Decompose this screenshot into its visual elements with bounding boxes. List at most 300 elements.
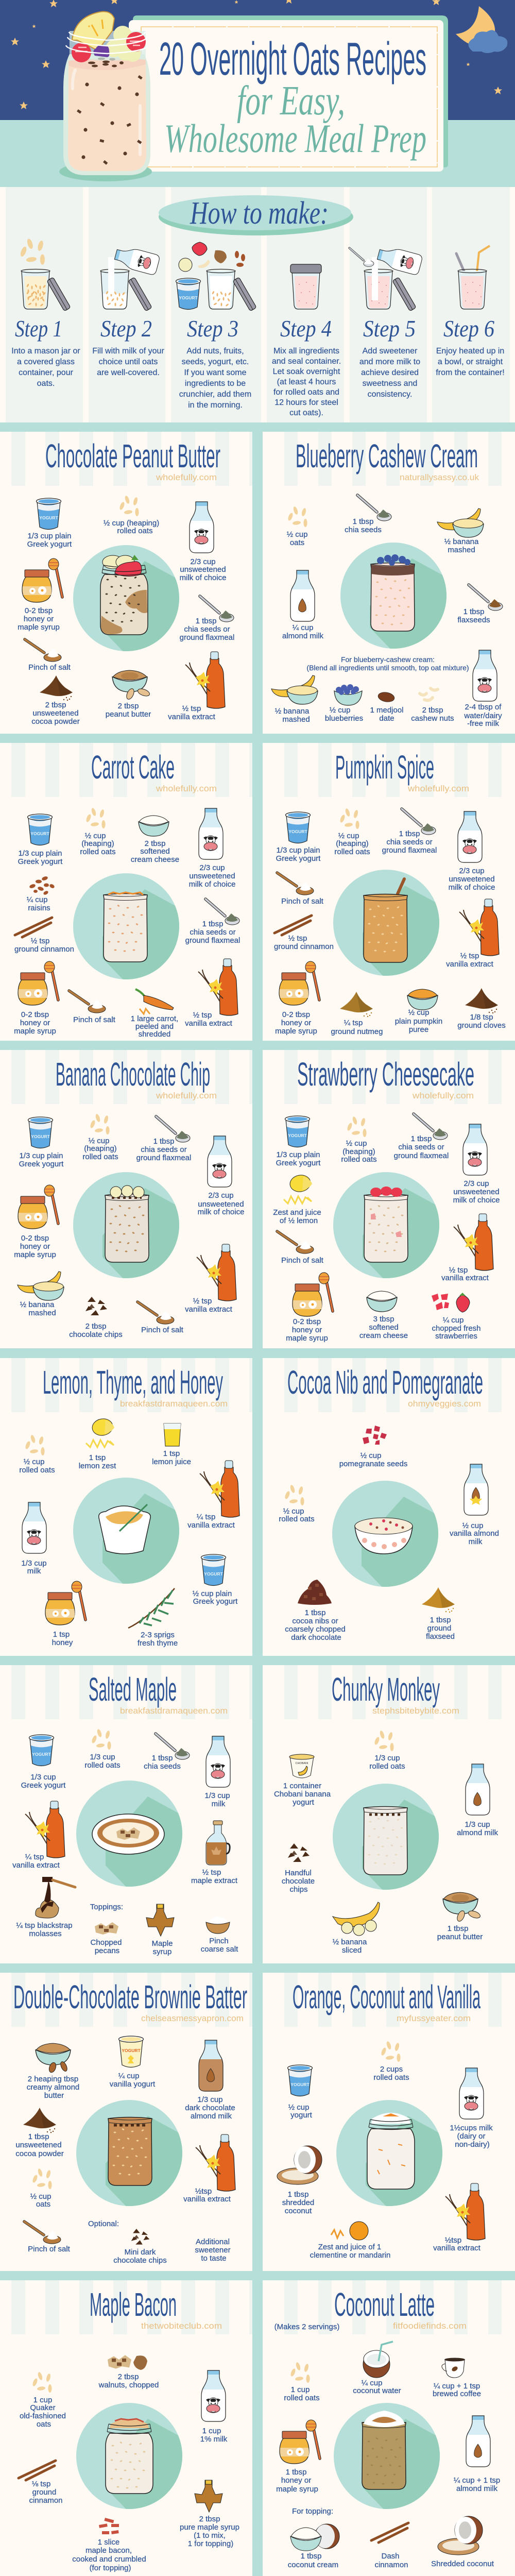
ingredient: strawberries: [432, 1293, 481, 1341]
ingredient: banana: ½ banana: [444, 537, 479, 546]
text: step 4: cut oats).: [289, 409, 323, 417]
ingredient: cocoa powder: 2 tbsp: [45, 701, 66, 709]
label: step 2: Step 2: [100, 315, 152, 342]
ingredient: chia: chia seeds or: [190, 928, 236, 937]
ingredient: chocolate almond milk: 1/3 cup: [197, 2095, 223, 2104]
ingredient: strawberries: ¼ cup: [443, 1316, 464, 1325]
ingredient: vanilla: ½ tsp: [460, 952, 479, 960]
ingredient: oats: [82, 1113, 118, 1161]
ingredient: vanilla: ½ tsp: [193, 1011, 212, 1020]
ingredient: bacon: [72, 2518, 146, 2572]
ingredient: water or milk: -free milk: [467, 719, 499, 728]
text: step 4: Mix all ingredients: [273, 347, 339, 355]
panel: Strawberry Cheesecake: [273, 1056, 500, 1343]
ingredient: lemon juice: lemon juice: [152, 1458, 191, 1466]
ingredient: milk: milk: [27, 1567, 41, 1575]
note: cream directions: (Blend all ingredients until smooth, top oat mixture): [306, 664, 469, 672]
ingredient: maple syrup: [146, 1904, 174, 1956]
ingredient: almond milk: 1/3 cup: [465, 1820, 490, 1829]
label: step 5: Step 5: [363, 315, 416, 342]
ingredient: chia: ground flaxmeal: [394, 1151, 449, 1160]
step 6: [436, 246, 505, 377]
ingredient: bacon: cooked and crumbled: [72, 2555, 146, 2564]
ingredient: yogurt: Greek yogurt: [27, 540, 72, 549]
ingredient: water or milk: water/dairy: [464, 711, 502, 720]
ingredient: honey: honey or: [24, 615, 54, 623]
icon: add nuts, fruits and yogurt: [176, 242, 256, 311]
ingredient: almond milk: almond milk: [457, 1828, 499, 1837]
text: step 3: Add nuts, fruits,: [186, 347, 244, 355]
ingredient: oats: rolled oats: [80, 848, 116, 856]
ingredient: banana: [18, 1272, 64, 1317]
ingredient: oats: [369, 1730, 405, 1771]
ingredient: cream cheese: softened: [369, 1323, 399, 1332]
ingredient: milk: 2/3 cup: [464, 1179, 489, 1188]
ingredient: oats: oats: [290, 538, 304, 547]
ingredient: cloves: ground cloves: [457, 1021, 506, 1030]
ingredient: oats: [341, 1116, 377, 1164]
ingredient: salt: Pinch of salt: [281, 897, 324, 906]
ingredient: cloves: [457, 988, 506, 1030]
ingredient: yogurt: Greek yogurt: [276, 854, 321, 863]
ingredient: salt: Pinch of salt: [281, 1256, 324, 1265]
panel: Carrot Cake: Carrot Cake: [91, 749, 175, 786]
ingredient: honey: 0-2 tbsp: [25, 606, 53, 615]
ingredient: chocolate chips: [282, 1843, 315, 1894]
ingredient: yogurt: 1/3 cup: [30, 1773, 56, 1782]
ingredient: vanilla: vanilla extract: [168, 713, 216, 721]
ingredient: oats: Quaker: [30, 2403, 56, 2412]
ingredient: cinnamon: [371, 2523, 408, 2569]
ingredient: thyme: [128, 1588, 178, 1648]
ingredient: coarse salt: Pinch: [209, 1937, 229, 1945]
ingredient: honey: 0-2 tbsp: [21, 1010, 49, 1019]
source: wholefully.com: [156, 1091, 217, 1100]
ingredient: milk: 2/3 cup: [190, 557, 216, 566]
ingredient: milk: 1 cup: [202, 2427, 221, 2435]
ingredient: oats: ½ cup: [287, 530, 307, 539]
illustration: jar on disc: [73, 545, 183, 660]
ingredient: chia: [136, 1116, 191, 1162]
ingredient: chia: 1 tbsp: [399, 829, 420, 838]
ingredient: yogurt: ½ cup: [288, 2103, 309, 2112]
ingredient: carrot: 1 large carrot,: [131, 1014, 178, 1023]
ingredient: honey: honey or: [20, 1242, 50, 1251]
ingredient: cocoa powder: 1 tbsp: [28, 2132, 49, 2141]
ingredient: chocolate chips: 2 tbsp: [85, 1322, 106, 1331]
panel: Carrot Cake: [14, 749, 240, 1039]
ingredient: milk: [453, 1124, 500, 1205]
ingredient: cocoa nibs: cocoa nibs or: [292, 1617, 338, 1625]
icon: sealed jar: [290, 264, 321, 309]
ingredient: banana mashed: ½ banana: [275, 707, 310, 716]
ingredient: chia: chia seeds or: [386, 838, 433, 846]
ingredient: yogurt: 1/3 cup plain: [27, 532, 72, 540]
text: Lemon, Thyme, and Honey: [43, 1364, 223, 1401]
ingredient: chia: 1 tbsp: [153, 1137, 174, 1146]
ingredient: milk: 1½cups milk: [450, 2124, 493, 2132]
ingredient: chia: [345, 495, 391, 534]
panel: Chocolate Peanut Butter: Chocolate Peanut Butter: [45, 437, 220, 474]
label: optional: Optional:: [88, 2219, 119, 2228]
text: step 3: seeds, yogurt, etc.: [182, 358, 249, 366]
ingredient: vanilla yogurt: [110, 2036, 156, 2089]
ingredient: cocoa powder: [31, 675, 80, 726]
ingredient: date: [370, 691, 404, 723]
illustration: jar on disc: [336, 2100, 446, 2215]
ingredient: honey: [286, 1273, 333, 1343]
ingredient: milk: [21, 1502, 47, 1575]
ingredient: yogurt: yogurt: [290, 2111, 313, 2120]
ingredient: milk: [200, 2370, 228, 2444]
ingredient: oats: rolled oats: [117, 527, 153, 535]
ingredient: almond milk: almond milk: [456, 2484, 498, 2493]
ingredient: peanut butter: [437, 1892, 483, 1941]
ingredient: almond milk: [454, 2416, 500, 2493]
hero mason jar: [59, 11, 152, 181]
illustration: jar on disc: [333, 1172, 443, 1287]
text: step 1: container, pour: [19, 368, 74, 377]
ingredient: cinnamon: ground cinnamon: [274, 942, 334, 951]
ingredient: bacon: 1 slice: [98, 2538, 119, 2547]
source: naturallysassy.co.uk: [400, 472, 479, 482]
ingredient: carrot: [131, 989, 178, 1039]
ingredient: banana: [437, 509, 484, 554]
ingredient: lemon: [273, 1174, 321, 1225]
ingredient: vanilla: vanilla extract: [183, 2195, 231, 2204]
ingredient: chocolate chips: chocolate chips: [69, 1330, 123, 1339]
ingredient: honey: [275, 961, 319, 1036]
ingredient: milk: milk of choice: [198, 1208, 244, 1216]
ingredient: lemon zest: 1 tsp: [89, 1453, 106, 1462]
source: wholefully.com: [412, 1091, 474, 1100]
ingredient: molasses: ¼ tsp blackstrap: [16, 1921, 73, 1930]
source: thetwobiteclub.com: [141, 2321, 222, 2331]
ingredient: cinnamon: [14, 918, 74, 954]
ingredient: banana: [333, 1902, 380, 1955]
ingredient: cinnamon: ground cinnamon: [14, 945, 74, 954]
ingredient: molasses: [16, 1877, 75, 1938]
ingredient: maple extract: ½ tsp: [202, 1868, 221, 1877]
ingredient: flaxseeds: flaxseeds: [457, 616, 490, 624]
ingredient: milk: [198, 1136, 244, 1216]
ingredient: vanilla: vanilla extract: [433, 2244, 481, 2252]
ingredient: oats: rolled oats: [82, 1153, 118, 1161]
ingredient: pumpkin: plain pumpkin: [395, 1017, 442, 1026]
ingredient: oats: 1/3 cup: [374, 1754, 400, 1762]
ingredient: honey: honey: [52, 1638, 73, 1647]
ingredient: vanilla: ¼ tsp: [197, 1513, 215, 1521]
ingredient: carrot: peeled and: [135, 1022, 174, 1031]
ingredient: cinnamon: ground: [32, 2488, 56, 2497]
ingredient: chocolate almond milk: almond milk: [191, 2112, 232, 2121]
ingredient: milk: milk of choice: [449, 883, 495, 892]
ingredient: honey: maple syrup: [18, 623, 60, 632]
ingredient: bacon: maple bacon,: [85, 2546, 132, 2555]
ingredient: flaxseed: 1 tbsp: [430, 1616, 451, 1624]
ingredient: chobani yogurt: 1 container: [283, 1782, 321, 1790]
ingredient: cinnamon: Dash: [381, 2552, 400, 2561]
ingredient: vanilla: ½tsp: [445, 2236, 461, 2245]
ingredient: strawberries: strawberries: [435, 1332, 477, 1341]
ingredient: mini chips: Mini dark: [125, 2248, 156, 2257]
panel: Salted Maple: Salted Maple: [89, 1671, 177, 1708]
ingredient: coffee: brewed coffee: [433, 2389, 481, 2398]
source: wholefully.com: [156, 472, 217, 482]
ingredient: lemon zest: lemon zest: [79, 1462, 116, 1470]
text: step 6: from the container!: [436, 368, 505, 377]
ingredient: milk: non-dairy): [455, 2140, 490, 2149]
label: for topping: For topping:: [292, 2507, 333, 2516]
ingredient: oats: [334, 808, 370, 856]
step 4: [272, 264, 341, 417]
ingredient: vanilla almond milk: milk: [469, 1537, 483, 1546]
source: ohmyveggies.com: [408, 1399, 481, 1409]
panel: Lemon, Thyme, and Honey: [19, 1364, 239, 1648]
ingredient: vanilla: [168, 652, 225, 721]
ingredient: vanilla almond milk: [450, 1464, 499, 1546]
ingredient: milk: [450, 2068, 493, 2149]
ingredient: honey: 1 tbsp: [286, 2468, 306, 2477]
step 2: [92, 245, 164, 377]
ingredient: bacon: (for topping): [90, 2564, 131, 2572]
ingredient: vanilla: ½ tsp: [182, 704, 201, 713]
ingredient: flaxseed: ground: [427, 1624, 451, 1633]
ingredient: oats: oats: [37, 2420, 51, 2429]
ingredient: pomegranate: pomegranate seeds: [339, 1460, 407, 1468]
ingredient: milk: 2/3 cup: [459, 867, 485, 875]
ingredient: coconut cream: coconut cream: [288, 2561, 338, 2569]
ingredient: vanilla almond milk: vanilla almond: [450, 1529, 499, 1538]
icon: crescent moon and cloud: [456, 6, 507, 53]
ingredient: walnuts: walnuts, chopped: [98, 2381, 159, 2389]
ingredient: coffee: ¼ cup + 1 tsp: [434, 2382, 480, 2391]
ingredient: oats: (heaping): [342, 1147, 375, 1156]
ingredient: cream cheese: [131, 816, 179, 864]
ingredient: yogurt: [27, 498, 72, 549]
ingredient: banana: ½ banana: [20, 1300, 55, 1309]
ingredient: oats: oats: [36, 2200, 50, 2209]
note: cream directions: For blueberry-cashew cream:: [341, 655, 435, 664]
label: step 3: Step 3: [187, 315, 238, 342]
ingredient: oats: (heaping): [336, 839, 369, 848]
ingredient: honey: 0-2 tbsp: [293, 1317, 321, 1326]
ingredient: lemon juice: 1 tsp: [163, 1449, 180, 1458]
ingredient: oats: rolled oats: [84, 1761, 121, 1770]
ingredient: yogurt: Greek yogurt: [21, 1781, 66, 1790]
ingredient: yogurt: [276, 812, 321, 863]
ingredient: chia: [144, 1734, 190, 1771]
ingredient: banana mashed: mashed: [282, 715, 310, 724]
ingredient: maple extract: maple extract: [191, 1876, 238, 1885]
ingredient: chocolate chips: chips: [289, 1885, 308, 1894]
ingredient: oats: [279, 1484, 315, 1523]
ingredient: oats: ½ cup: [85, 832, 106, 840]
ingredient: cinnamon: cinnamon: [29, 2496, 63, 2505]
ingredient: oats: [104, 495, 159, 535]
illustration: jar on disc: [334, 2403, 443, 2518]
ingredient: yogurt: [287, 2065, 313, 2120]
step 1: [11, 238, 80, 388]
ingredient: blueberries: [325, 684, 363, 723]
ingredient: oats: ½ cup: [89, 1137, 109, 1145]
illustration: jar on disc: [73, 1172, 183, 1287]
ingredient: date: 1 medjool: [370, 706, 404, 715]
ingredient: coconut cream: [288, 2524, 339, 2569]
section: how to make: [0, 187, 515, 422]
panel: Cocoa Nib and Pomegranate: [279, 1364, 499, 1642]
ingredient: cream cheese: cream cheese: [359, 1331, 408, 1340]
ingredient: cloves: 1/8 tsp: [470, 1013, 493, 1022]
ingredient: date: date: [379, 714, 394, 723]
ingredient: water or milk: [464, 650, 502, 728]
ingredient: honey: maple syrup: [275, 1027, 317, 1036]
ingredient: vanilla: [433, 2183, 485, 2252]
title line 2: for Easy,: [237, 78, 345, 124]
ingredient: salt: Pinch of salt: [28, 663, 71, 672]
ingredient: honey: maple syrup: [14, 1027, 56, 1036]
icon: add sweetener and milk: [349, 245, 423, 311]
ingredient: yogurt: Greek yogurt: [19, 1160, 64, 1168]
ingredient: oats: [80, 807, 116, 856]
ingredient: oats: rolled oats: [279, 1515, 315, 1523]
ingredient: banana: mashed: [28, 1309, 56, 1317]
step 5: [349, 245, 423, 399]
ingredient: sweetener: Additional: [196, 2238, 230, 2246]
ingredient: pumpkin: puree: [409, 1025, 428, 1034]
ingredient: milk: unsweetened: [453, 1188, 500, 1196]
ingredient: cocoa powder: [15, 2108, 64, 2158]
label: step 4: Step 4: [280, 315, 332, 342]
ingredient: yogurt: Greek yogurt: [18, 857, 63, 866]
ingredient: coconut: 1 tbsp: [288, 2190, 308, 2199]
ingredient: yogurt: Greek yogurt: [193, 1597, 238, 1606]
panel: Chunky Monkey: [274, 1671, 499, 1955]
text: step 6: Enjoy heated up in: [436, 347, 504, 355]
ingredient: almond butter: butter: [44, 2091, 64, 2100]
ingredient: milk: [449, 811, 495, 892]
panel: Maple Bacon: Maple Bacon: [90, 2286, 177, 2323]
ingredient: chia: ground flaxmeal: [180, 633, 234, 642]
ingredient: thyme: 2-3 sprigs: [141, 1631, 175, 1639]
ingredient: coconut: [277, 2146, 322, 2215]
ingredient: banana: ½ banana: [333, 1938, 367, 1946]
ingredient: cashews: 2 tbsp: [422, 706, 443, 715]
ingredient: honey: maple syrup: [14, 1250, 56, 1259]
ingredient: walnuts: 2 tbsp: [118, 2372, 139, 2381]
ingredient: cocoa nibs: [285, 1580, 346, 1642]
ingredient: cocoa nibs: 1 tbsp: [305, 1608, 325, 1617]
ingredient: oats: 1 cup: [33, 2396, 52, 2404]
source: chelseasmessyapron.com: [141, 2013, 244, 2023]
ingredient: honey: honey or: [292, 1326, 322, 1334]
ingredient: nutmeg: ¼ tsp: [344, 1019, 363, 1027]
ingredient: yogurt: 1/3 cup plain: [276, 1150, 320, 1159]
text: step 2: Fill with milk of your: [92, 347, 164, 355]
heading: how to make: [159, 195, 353, 235]
ingredient: yogurt: [19, 1117, 64, 1168]
ingredient: oats: [84, 1728, 121, 1770]
ingredient: yogurt: 1/3 cup plain: [276, 846, 320, 855]
ingredient: salt: [24, 2222, 71, 2253]
source: wholefully.com: [156, 784, 217, 793]
icon: enjoy with spoon and straw: [456, 246, 490, 309]
ingredient: cream cheese: 3 tbsp: [373, 1315, 394, 1324]
ingredient: milk: unsweetened: [198, 1200, 244, 1209]
ingredient: maple syrup: 2 tbsp: [199, 2515, 220, 2523]
ingredient: cocoa powder: cocoa powder: [15, 2149, 64, 2158]
ingredient: peanut butter: 2 tbsp: [118, 702, 139, 710]
source: stephsbitebybite.com: [372, 1706, 459, 1716]
ingredient: coarse salt: [201, 1917, 238, 1954]
ingredient: maple syrup: Maple: [152, 1939, 173, 1948]
source: breakfastdramaqueen.com: [120, 1706, 228, 1716]
ingredient: honey: [18, 558, 62, 632]
ingredient: maple syrup: (1 to mix,: [194, 2531, 226, 2540]
ingredient: flaxseeds: 1 tbsp: [464, 607, 484, 616]
ingredient: banana: mashed: [448, 546, 475, 554]
ingredient: chia: 1 tbsp: [196, 617, 216, 625]
panel: Banana Chocolate Chip: Banana Chocolate Chip: [56, 1056, 210, 1093]
ingredient: maple syrup: syrup: [153, 1947, 171, 1956]
text: step 2: choice until oats: [99, 358, 158, 366]
ingredient: oats: (heaping): [81, 839, 114, 848]
ingredient: flaxseed: flaxseed: [426, 1632, 455, 1641]
ingredient: chocolate chips: chocolate: [282, 1877, 315, 1886]
ingredient: vanilla: [441, 1214, 493, 1282]
panel: Salted Maple: [12, 1671, 238, 1956]
panel: Chocolate Peanut Butter: [18, 437, 234, 726]
ingredient: orange: [310, 2222, 390, 2260]
ingredient: cinnamon: [19, 2461, 63, 2505]
ingredient: raisins: [27, 876, 55, 912]
ingredient: blueberries: ½ cup: [330, 706, 350, 715]
text: step 4: (at least 4 hours: [277, 378, 336, 386]
ingredient: salt: [25, 639, 71, 672]
ingredient: oats: ½ cup: [346, 1139, 367, 1148]
ingredient: chia: 1 tbsp: [152, 1754, 173, 1762]
source: breakfastdramaqueen.com: [120, 1399, 228, 1409]
ingredient: almond milk: ¼ cup: [293, 623, 313, 632]
ingredient: chia: 1 tbsp: [411, 1134, 432, 1143]
ingredient: nutmeg: [331, 992, 383, 1036]
ingredient: milk: (dairy or: [457, 2132, 486, 2141]
ingredient: cinnamon: ½ tsp: [31, 937, 49, 945]
ingredient: oats: [19, 1434, 55, 1475]
ingredient: honey: 0-2 tbsp: [282, 1010, 310, 1019]
text: step 6: a bowl, or straight: [438, 358, 503, 366]
ingredient: chia: [185, 899, 240, 945]
ingredient: oats: 2 cups: [380, 2065, 403, 2074]
illustration: bowl on disc: [76, 1781, 186, 1895]
text: step 2: are well-covered.: [97, 368, 160, 377]
ingredient: vanilla yogurt: ¼ cup: [118, 2072, 139, 2080]
panel: Coconut Latte: [274, 2286, 500, 2569]
ingredient: cocoa powder: unsweetened: [15, 2141, 62, 2149]
ingredient: honey: 0-2 tbsp: [21, 1234, 49, 1243]
ingredient: pecans: Chopped: [91, 1938, 122, 1947]
ingredient: salt: Pinch of salt: [73, 1015, 116, 1024]
ingredient: vanilla: ½ tsp: [193, 1297, 212, 1306]
ingredient: lemon juice: [152, 1423, 191, 1466]
ingredient: oats: ½ cup: [283, 1507, 304, 1516]
text: step 3: ingredients to be: [185, 379, 246, 388]
ingredient: oats: [20, 2371, 66, 2429]
ingredient: vanilla: ½tsp: [195, 2187, 212, 2196]
ingredient: maple syrup: pure maple syrup: [180, 2523, 239, 2532]
ingredient: pomegranate: [339, 1426, 407, 1468]
ingredient: coconut water: coconut water: [353, 2386, 401, 2395]
